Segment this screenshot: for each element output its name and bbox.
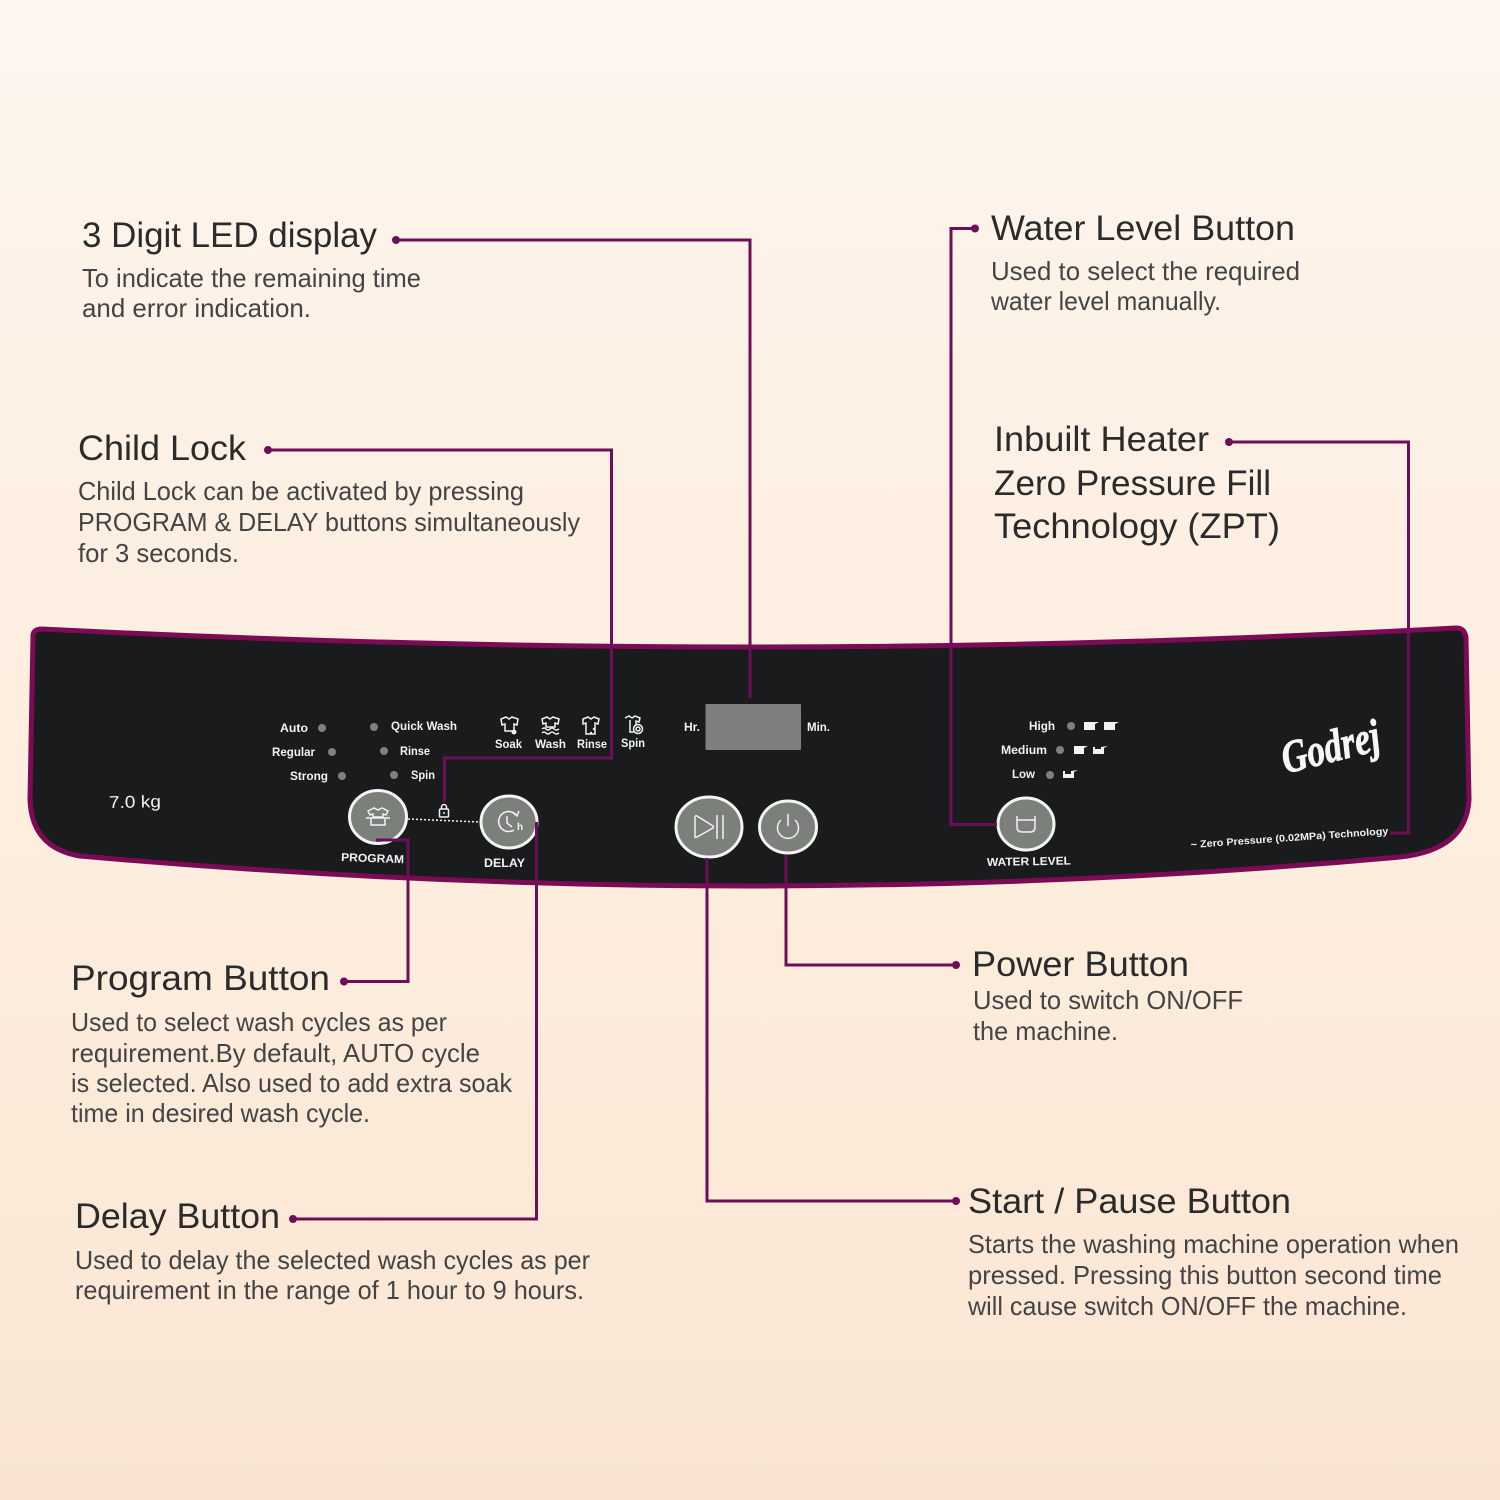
callout: water level button: water level manually. <box>990 286 1221 316</box>
wash stage icons: Rinse <box>577 739 607 751</box>
callout: program button: requirement.By default, AUTO cycle <box>71 1038 480 1068</box>
water level button <box>987 798 1071 869</box>
connector: start pause <box>707 858 960 1205</box>
wash stage icons: Wash <box>535 739 566 751</box>
callout: program button: is selected. Also used to add extra soak <box>71 1068 513 1098</box>
callout: child lock: for 3 seconds. <box>78 538 239 568</box>
callout: program button: Program Button <box>71 959 330 998</box>
callout: power button <box>972 945 1243 1046</box>
callout: 3 digit LED display: and error indication. <box>82 293 311 323</box>
program button <box>341 790 406 866</box>
connector: child lock <box>264 446 612 802</box>
delay button <box>481 796 537 870</box>
capacity label: 7.0 kg <box>109 792 161 812</box>
callout: inbuilt heater and ZPT: Zero Pressure Fill <box>994 464 1271 503</box>
connector: delay <box>289 822 536 1223</box>
callout: program button: Used to select wash cycles as per <box>71 1007 447 1037</box>
callout: start pause button: Start / Pause Button <box>968 1182 1291 1221</box>
callout: child lock: Child Lock <box>78 429 247 468</box>
display labels: Min. <box>807 722 830 734</box>
power button <box>760 801 816 853</box>
callout: water level button: Water Level Button <box>991 209 1295 248</box>
callout: 3 digit LED display: To indicate the remaining time <box>82 263 421 293</box>
wash stage icons: Spin <box>621 738 645 750</box>
callout: water level button <box>990 209 1300 316</box>
callout: 3 digit LED display: 3 Digit LED display <box>82 216 377 255</box>
callout: delay button: Delay Button <box>75 1197 280 1236</box>
technology tagline: ~ Zero Pressure (0.02MPa) Technology <box>1190 826 1389 851</box>
delay button: h <box>517 822 523 833</box>
brand logo: Godrej <box>1276 710 1385 783</box>
callout: power button: Power Button <box>972 945 1189 984</box>
water level options: Medium <box>1001 745 1047 757</box>
callout: power button: the machine. <box>973 1016 1118 1046</box>
connector: power <box>786 855 960 969</box>
callout: inbuilt heater and ZPT <box>994 420 1280 546</box>
connector: water level <box>951 224 997 824</box>
program options: Strong <box>290 771 328 783</box>
water level options: Low <box>1012 769 1035 781</box>
callout: program button: time in desired wash cycle. <box>71 1098 370 1128</box>
connector: inbuilt heater <box>1225 438 1408 833</box>
program options: Spin <box>411 770 435 782</box>
callout: inbuilt heater and ZPT: Technology (ZPT) <box>994 507 1280 546</box>
callout: child lock <box>78 429 580 568</box>
delay button: DELAY <box>484 858 525 870</box>
connector: child lock link between buttons <box>408 805 480 822</box>
callout: start pause button: Starts the washing machine operation when <box>968 1229 1459 1259</box>
program options <box>272 721 457 783</box>
LED display <box>706 704 801 750</box>
callout: program button <box>71 959 513 1128</box>
water level options <box>1001 721 1119 781</box>
wash stage icons <box>495 716 645 751</box>
water level options: High <box>1029 721 1055 733</box>
water level button: WATER LEVEL <box>987 856 1071 869</box>
program options: Regular <box>272 747 316 759</box>
program button: PROGRAM <box>341 852 404 866</box>
callout: start pause button <box>967 1182 1459 1321</box>
program options: Quick Wash <box>391 721 457 733</box>
connector: LED display <box>392 236 750 698</box>
callout: delay button <box>75 1197 590 1305</box>
callout: 3 digit LED display <box>82 216 421 323</box>
callout: delay button: requirement in the range of 1 hour to 9 hours. <box>75 1275 584 1305</box>
display labels: Hr. <box>684 722 700 734</box>
callout: start pause button: will cause switch ON/OFF the machine. <box>967 1291 1407 1321</box>
start pause button <box>676 797 742 857</box>
wash stage icons: Soak <box>495 739 523 751</box>
callout: power button: Used to switch ON/OFF <box>973 985 1243 1015</box>
callout: inbuilt heater and ZPT: Inbuilt Heater <box>994 420 1209 459</box>
control panel <box>30 628 1469 886</box>
program options: Auto <box>280 723 308 735</box>
program options: Rinse <box>400 746 430 758</box>
callout: start pause button: pressed. Pressing this button second time <box>968 1260 1442 1290</box>
callout: child lock: Child Lock can be activated by pressing <box>78 476 524 506</box>
connector: program <box>340 840 408 986</box>
callout: child lock: PROGRAM & DELAY buttons simultaneously <box>78 507 580 537</box>
display labels <box>684 722 830 734</box>
callout: delay button: Used to delay the selected wash cycles as per <box>75 1245 590 1275</box>
panel body <box>30 628 1469 886</box>
callout: water level button: Used to select the required <box>991 256 1300 286</box>
